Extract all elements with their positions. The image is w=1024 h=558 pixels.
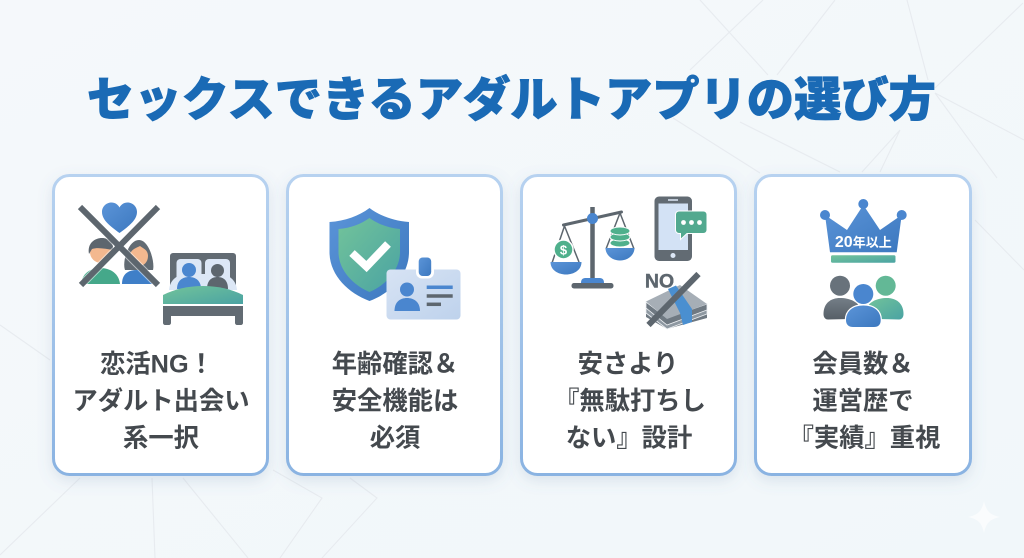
text: card 1: 恋活NG！ bbox=[100, 350, 214, 378]
icon: balance scale: $ bbox=[560, 242, 568, 258]
sparkle mark bbox=[968, 501, 1000, 533]
panel: no-waste design bbox=[522, 176, 736, 474]
text: card 2: 年齢確認＆ bbox=[332, 350, 458, 378]
text: card 2 bbox=[332, 350, 458, 452]
text: card 3: ない』設計 bbox=[566, 424, 692, 452]
icon: shield with check bbox=[330, 208, 409, 301]
icon: crown with 20 years bbox=[820, 199, 907, 263]
text: card 4: 運営歴で bbox=[812, 388, 914, 416]
text: card 4: 『実績』重視 bbox=[789, 424, 940, 452]
icon: phone with chat bubble bbox=[654, 196, 707, 261]
text: card 1: 系一択 bbox=[123, 424, 199, 452]
title: セックスできるアダルトアプリの選び方 bbox=[87, 61, 936, 130]
text: card 2: 必須 bbox=[370, 424, 420, 452]
icon: bed with two people bbox=[163, 253, 243, 325]
icon: balance scale bbox=[550, 207, 634, 288]
text: card 4: 会員数＆ bbox=[812, 350, 914, 378]
text: card 4 bbox=[789, 350, 940, 452]
text: card 1 bbox=[72, 350, 250, 452]
icon: crossed-out cash stack bbox=[646, 274, 707, 329]
text: card 1: アダルト出会い bbox=[72, 386, 250, 416]
text: card 3: 安さより bbox=[578, 350, 678, 378]
icon: couple crossed out bbox=[80, 207, 158, 285]
text: card 2: 安全機能は bbox=[332, 388, 458, 416]
panel: members and history bbox=[756, 176, 970, 474]
icon: heart bbox=[102, 202, 137, 233]
icon: crown with 20 years: 20年以上 bbox=[835, 234, 892, 251]
text: card 3: 『無駄打ちし bbox=[554, 388, 706, 416]
icon: ID card bbox=[386, 254, 460, 320]
panel: dating NG bbox=[54, 176, 268, 474]
text: card 3 bbox=[554, 350, 706, 452]
panel: age verification bbox=[288, 176, 502, 474]
icon: group of members bbox=[824, 276, 904, 327]
icon: NO text: NO bbox=[645, 270, 674, 292]
